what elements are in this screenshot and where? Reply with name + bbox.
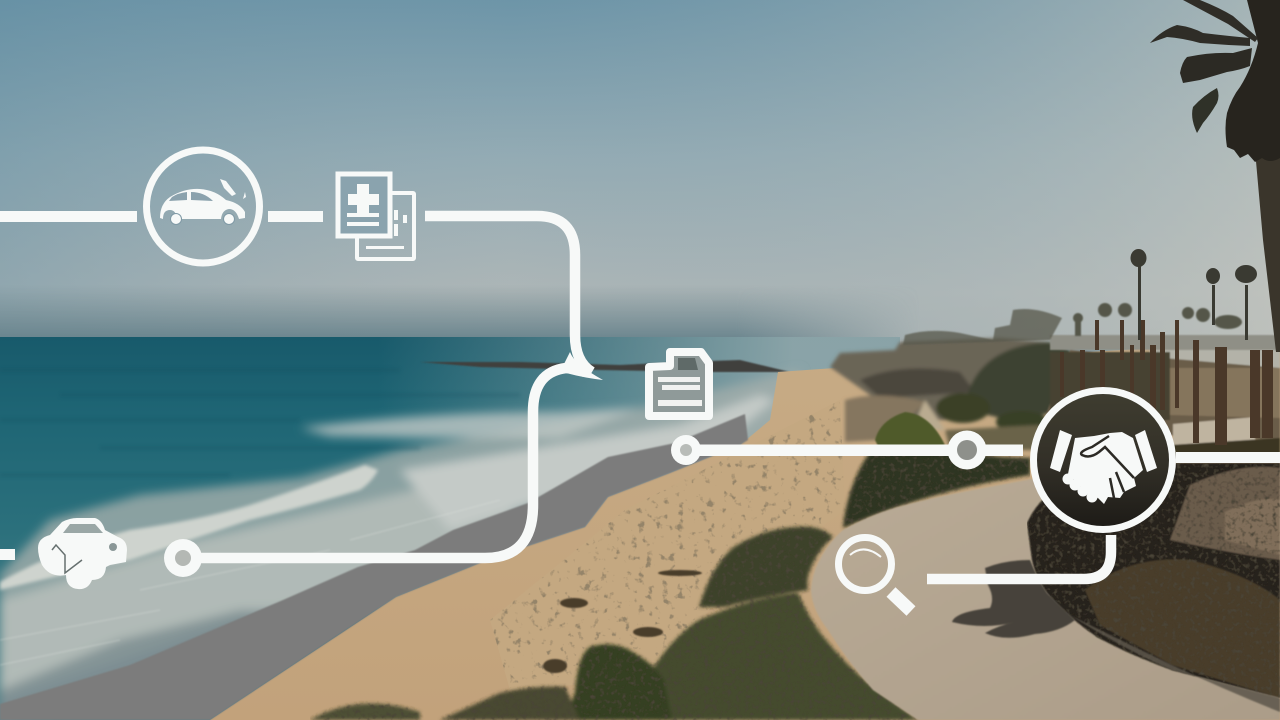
path shadow <box>952 560 1075 638</box>
ocean <box>0 337 900 720</box>
icon: car with smoke in circle <box>146 150 260 263</box>
icon: medical documents <box>338 174 414 259</box>
path: line from handshake to magnifier <box>927 535 1111 579</box>
icon: crashed car <box>38 518 127 589</box>
breaking wave crest <box>0 465 378 590</box>
land base <box>210 340 1280 720</box>
beach debris <box>543 570 702 673</box>
ground behind fence <box>1040 335 1280 460</box>
far dunes and debris <box>830 338 1070 450</box>
wet sand <box>0 414 748 720</box>
beach speckle <box>490 400 845 690</box>
coastal footpath <box>811 465 1280 720</box>
path: upper line into arrow tip <box>425 216 592 372</box>
distant rocks <box>420 360 790 372</box>
large palm tree <box>1150 0 1280 352</box>
shrub edge shadow <box>1070 615 1280 712</box>
path: arrow tip <box>564 352 603 380</box>
sky <box>0 0 1280 345</box>
path: short stub <box>0 549 15 560</box>
dune vegetation <box>310 445 1030 720</box>
path: start dot <box>164 539 202 577</box>
wooden fence <box>1060 320 1273 445</box>
icon: clipboard <box>649 352 709 416</box>
distant tree line <box>903 303 1242 345</box>
near green bush <box>875 412 945 450</box>
small palm trees <box>1130 249 1257 340</box>
path: middle line with nodes <box>671 430 1023 470</box>
path: top line segments <box>0 211 323 222</box>
shrubs by path <box>1027 463 1280 698</box>
water streaks <box>0 370 520 475</box>
path: right line <box>1176 452 1280 463</box>
path: lower line to start dot <box>183 368 585 558</box>
icon: magnifying glass <box>838 538 911 611</box>
icon: handshake in circle <box>1034 390 1172 530</box>
